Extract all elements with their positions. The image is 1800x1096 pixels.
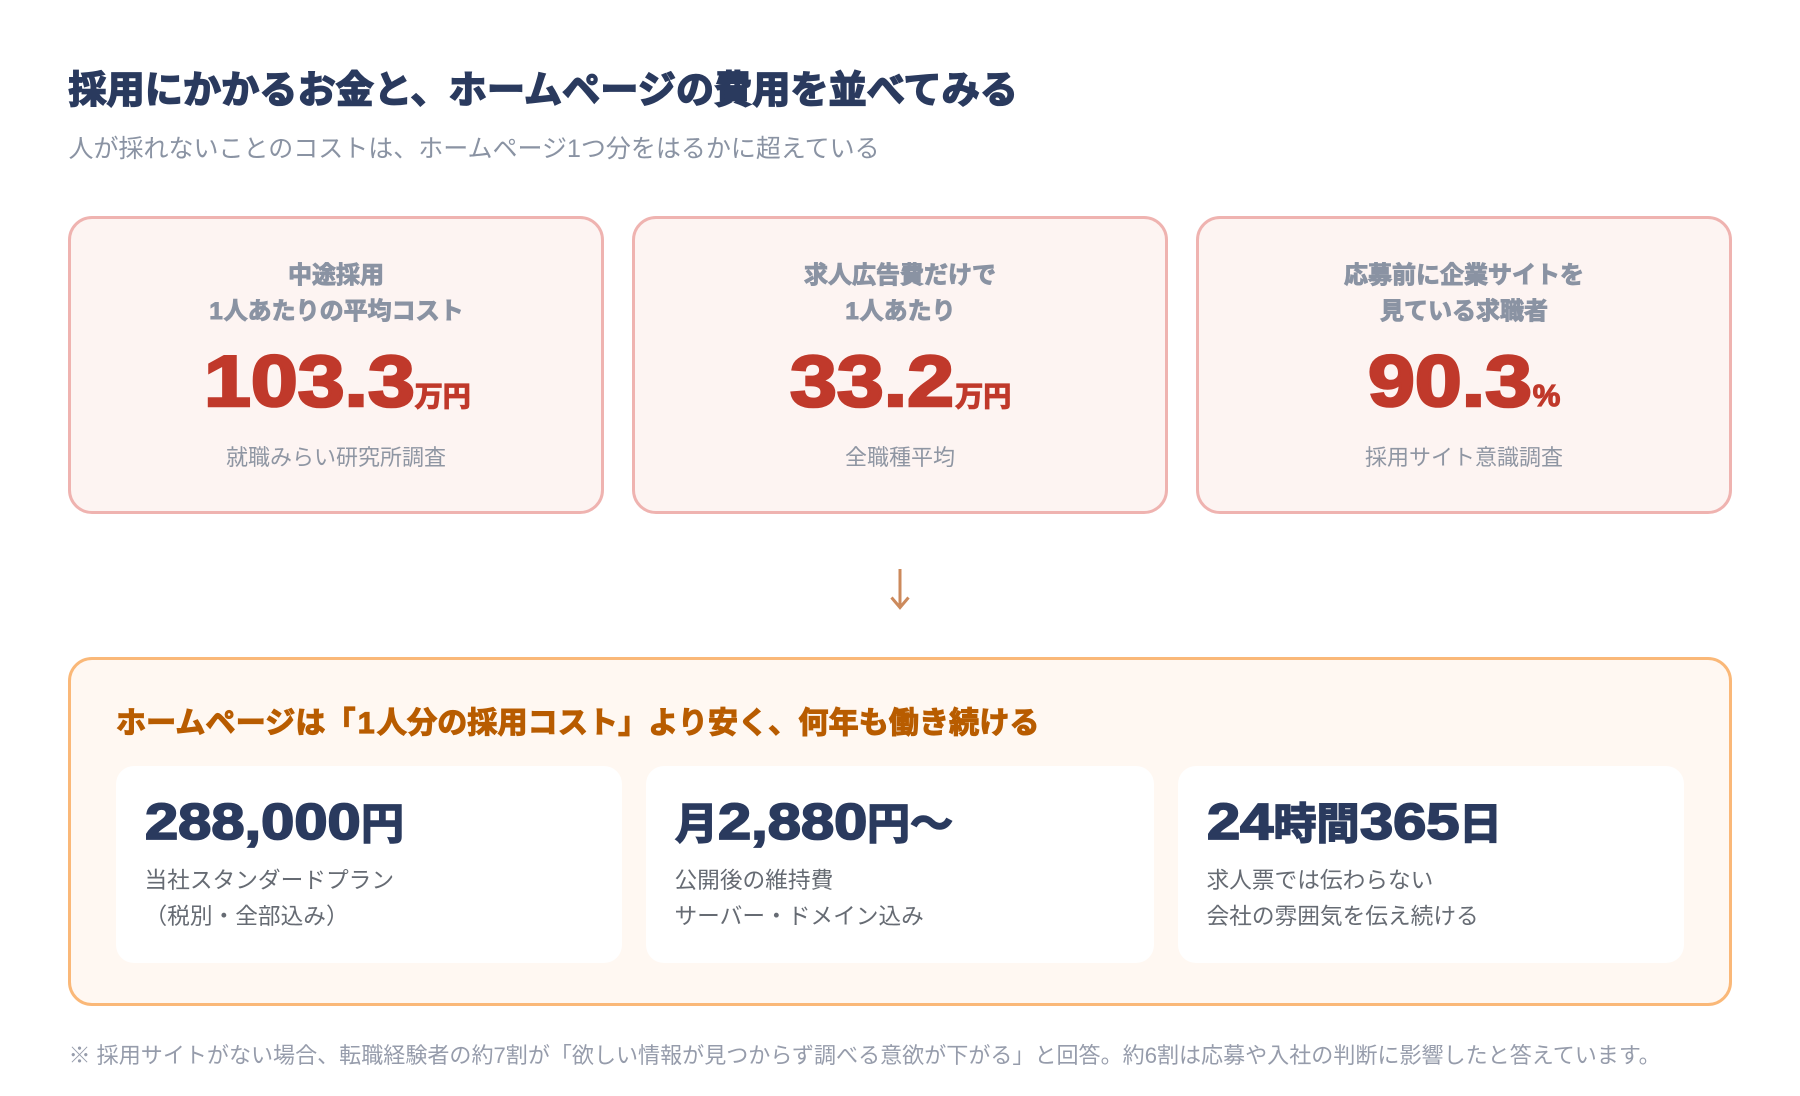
arrow xyxy=(890,569,910,610)
value: 24 xyxy=(1207,793,1273,850)
card source: 採用サイト意識調査 xyxy=(1365,444,1563,470)
value card: always on xyxy=(1178,766,1684,963)
description: 公開後の維持費 xyxy=(674,867,833,893)
description: 求人票では伝わらない xyxy=(1206,867,1433,893)
card figure: 33.2 xyxy=(790,342,954,422)
card source: 就職みらい研究所調査 xyxy=(226,444,446,470)
card label xyxy=(1344,262,1584,324)
card label: 1人あたり xyxy=(845,298,956,324)
value: 月 円〜 xyxy=(675,801,953,849)
card label: 応募前に企業サイトを xyxy=(1344,262,1584,288)
card label: 中途採用 xyxy=(288,262,384,288)
card figure: 103.3 xyxy=(204,342,415,422)
description: 当社スタンダードプラン xyxy=(144,867,394,893)
panel: homepage value xyxy=(68,656,1732,1006)
footnote: ※ 採用サイトがない場合、転職経験者の約7割が「欲しい情報が見つからず調べる意欲が下がる」と回答。約6割は応募や入社の判断に影響したと答えています。 xyxy=(68,1043,1661,1068)
panel: job seekers viewing company site xyxy=(1196,216,1732,514)
panel: job ad cost per hire xyxy=(632,216,1168,514)
title: 採用にかかるお金と、ホームページの費用を並べてみる xyxy=(68,70,1018,112)
description xyxy=(144,867,394,929)
card figure: 万円 xyxy=(955,381,1011,412)
description: サーバー・ドメイン込み xyxy=(674,903,924,929)
description xyxy=(674,867,924,929)
card label xyxy=(804,262,996,324)
value: 365 xyxy=(1360,793,1459,850)
value: 288,000 xyxy=(145,793,361,850)
panel heading: ホームページは「1人分の採用コスト」より安く、何年も働き続ける xyxy=(116,707,1040,740)
description xyxy=(1206,867,1479,929)
card label: 1人あたりの平均コスト xyxy=(209,298,464,324)
value: 2,880 xyxy=(718,793,867,850)
card label: 求人広告費だけで xyxy=(804,262,996,288)
subtitle: 人が採れないことのコストは、ホームページ1つ分をはるかに超えている xyxy=(68,135,880,163)
card label: 見ている求職者 xyxy=(1380,298,1548,324)
value card: maintenance xyxy=(646,766,1154,963)
value: 円 xyxy=(361,801,404,849)
description: 会社の雰囲気を伝え続ける xyxy=(1206,903,1479,929)
value xyxy=(1207,793,1502,850)
description: （税別・全部込み） xyxy=(144,903,349,929)
card label xyxy=(209,262,464,324)
value: 時間 日 xyxy=(1274,801,1502,849)
value card: price xyxy=(116,766,622,963)
card figure: 万円 xyxy=(415,381,471,412)
card figure: % xyxy=(1533,378,1560,413)
card source: 全職種平均 xyxy=(845,444,955,470)
card figure: 90.3 xyxy=(1368,342,1532,422)
panel: recruiting cost per hire xyxy=(68,216,604,514)
